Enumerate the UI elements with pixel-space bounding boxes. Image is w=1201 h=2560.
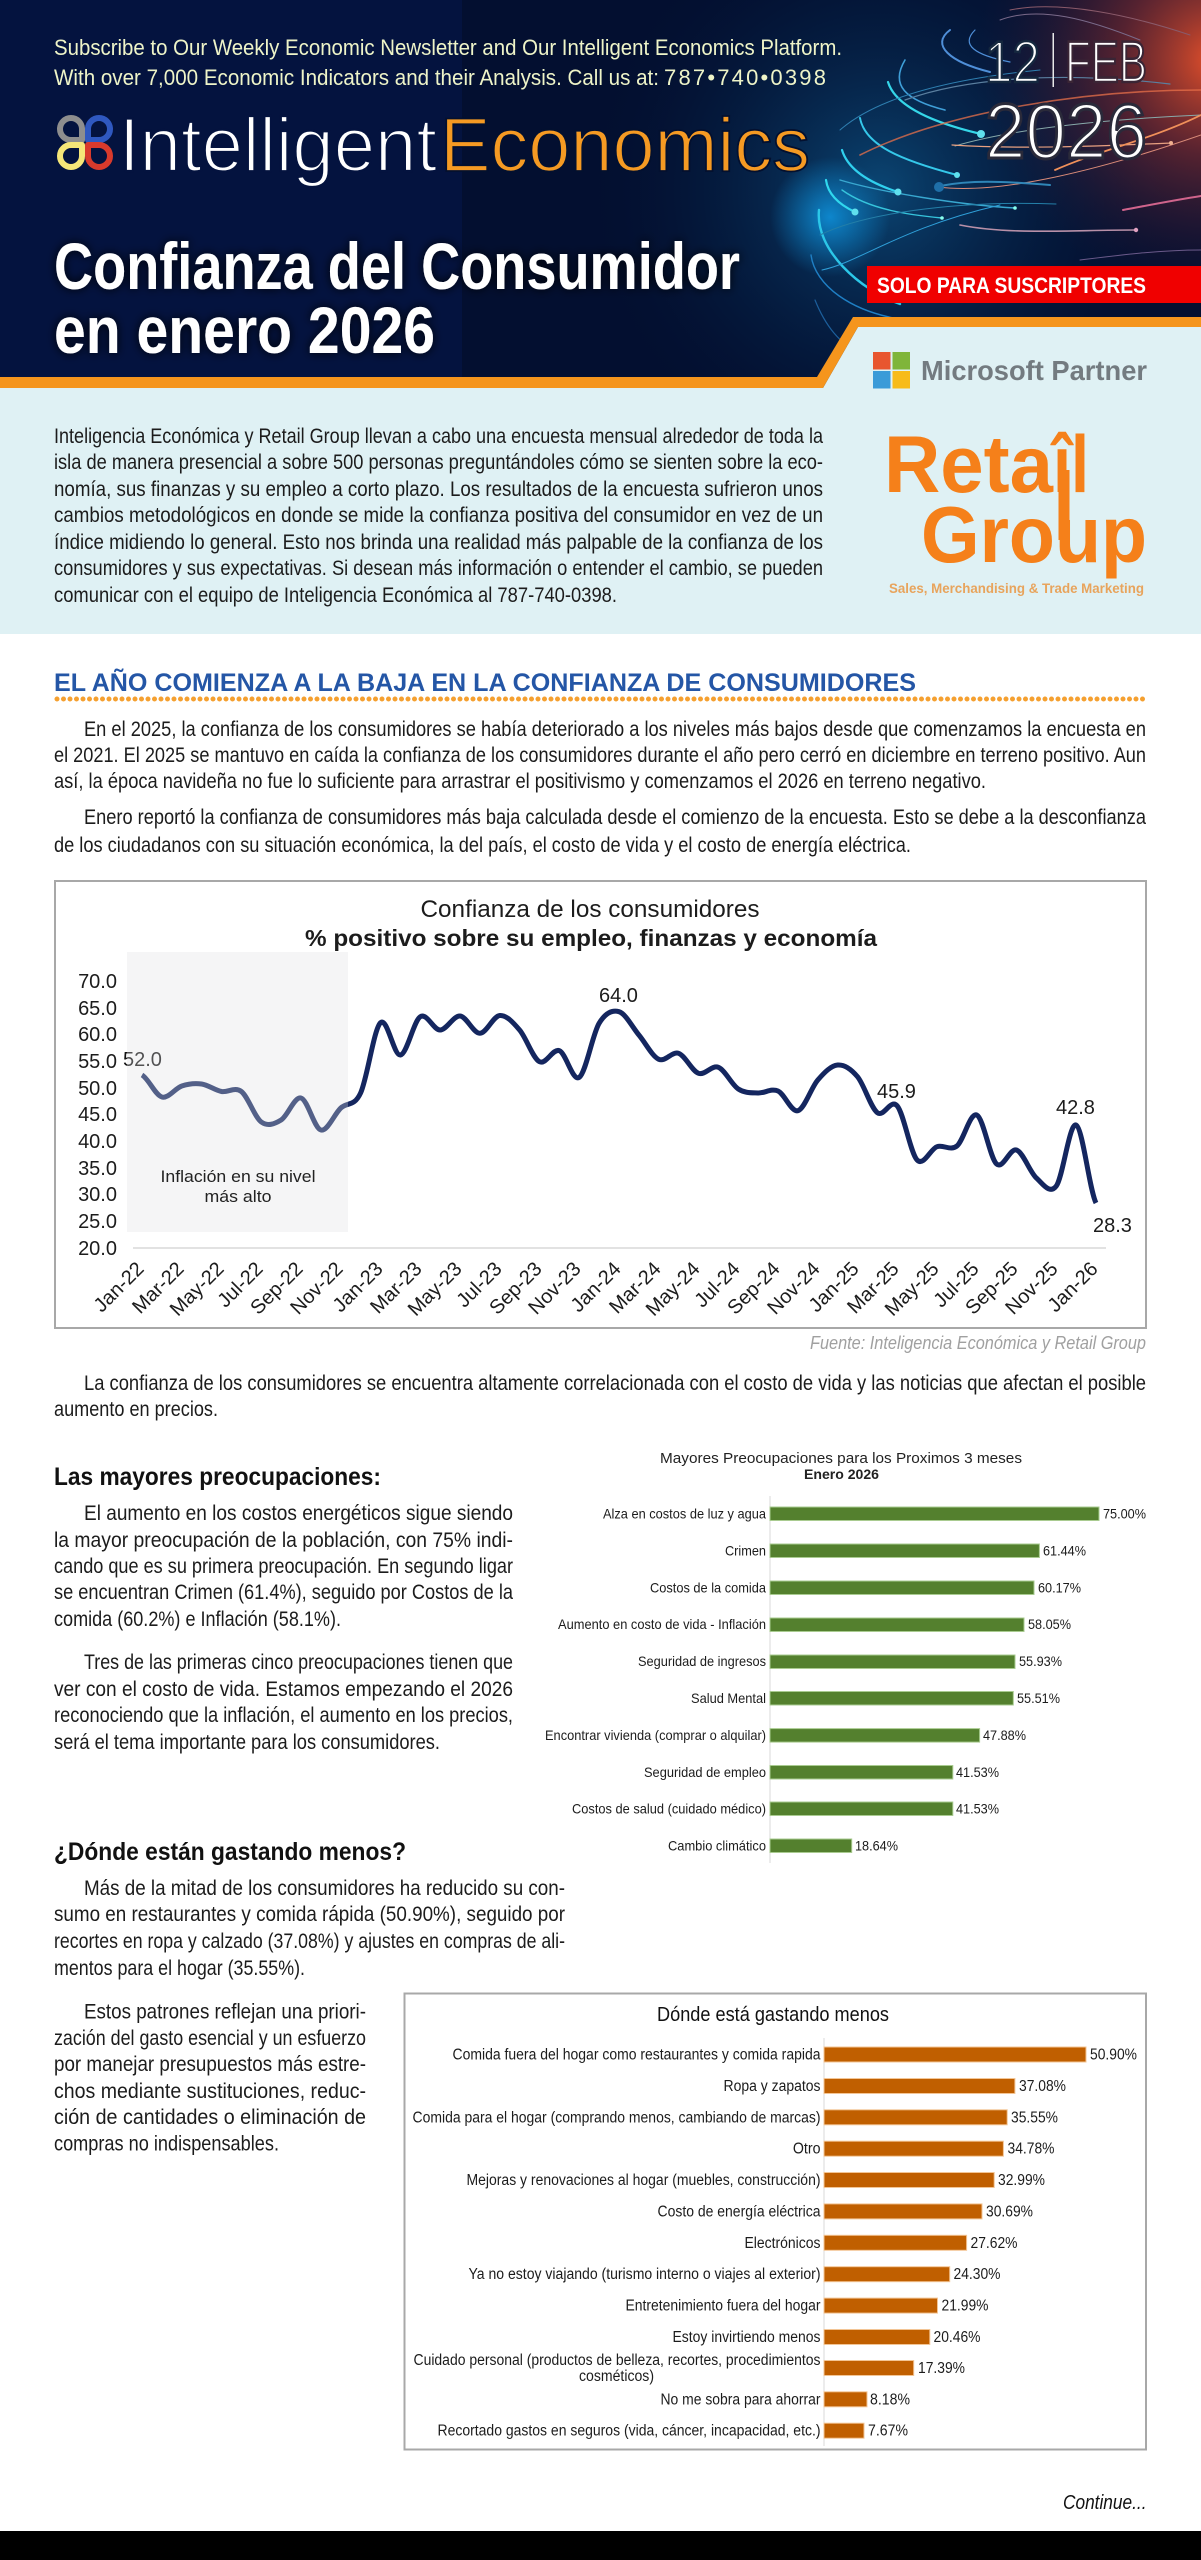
- annotation: inflation: más alto: [204, 1187, 272, 1206]
- value labels: 37.08%: [1019, 2078, 1066, 2095]
- category labels: Seguridad de empleo: [644, 1764, 766, 1780]
- category labels: [412, 2046, 821, 2440]
- value labels: 55.93%: [1019, 1653, 1062, 1669]
- x axis labels: Nov-25: [1001, 1258, 1063, 1319]
- x axis labels: May-22: [166, 1258, 229, 1321]
- intro text: Inteligencia Económica y Retail Group llevan a cabo una encuesta mensual alrededor de toda la: [54, 425, 823, 448]
- value labels: 35.55%: [1011, 2109, 1058, 2126]
- category labels: Costos de la comida: [650, 1580, 766, 1596]
- light panel background: [0, 327, 1201, 634]
- y axis labels: [78, 971, 117, 1260]
- category labels: Salud Mental: [691, 1690, 766, 1706]
- category labels: [545, 1506, 766, 1854]
- x axis labels: Jan-22: [90, 1258, 149, 1317]
- category labels: Crimen: [725, 1542, 766, 1558]
- value labels: [855, 1506, 1146, 1854]
- x axis labels: Jul-23: [452, 1258, 507, 1312]
- y axis labels: 40.0: [78, 1131, 117, 1153]
- x axis labels: Jan-24: [567, 1258, 626, 1317]
- section body text: así, la época navideña no fue lo suficiente para arrastrar el positivismo y comenzamos el 2026 en terreno negativo.: [54, 770, 986, 793]
- category labels: Costos de salud (cuidado médico): [572, 1800, 766, 1816]
- date: 2026: [985, 87, 1147, 175]
- annotation: inflation: Inflación en su nivel: [160, 1167, 316, 1186]
- correlation text: [54, 1372, 1146, 1421]
- subscription text: [54, 35, 842, 90]
- x axis labels: Sep-22: [246, 1258, 308, 1319]
- data labels: 45.9: [877, 1081, 916, 1103]
- category labels: Costo de energía eléctrica: [658, 2203, 821, 2220]
- x axis labels: May-23: [404, 1258, 467, 1321]
- value labels: 27.62%: [970, 2235, 1018, 2252]
- orange bars: [824, 2047, 1086, 2438]
- header background: [0, 0, 1201, 390]
- x axis labels: Nov-23: [524, 1258, 586, 1319]
- patrones text: ción de cantidades o eliminación de: [54, 2106, 366, 2129]
- gasto text: sumo en restaurantes y comida rápida (50.90%), seguido por: [54, 1903, 565, 1926]
- bar chart: mayores preocupaciones: [545, 1450, 1146, 1863]
- title: Confianza del Consumidor: [54, 229, 740, 303]
- chart title: Dónde está gastando menos: [657, 2004, 889, 2026]
- category labels: Estoy invirtiendo menos: [672, 2329, 821, 2346]
- x axis labels: Mar-23: [366, 1258, 427, 1318]
- category labels: Comida para el hogar (comprando menos, cambiando de marcas): [412, 2109, 820, 2126]
- patrones text: por manejar presupuestos más estre-: [54, 2053, 366, 2076]
- value labels: 8.18%: [870, 2391, 910, 2408]
- gasto text: [54, 1877, 565, 1980]
- category labels: Ropa y zapatos: [724, 2078, 821, 2095]
- green bars: [770, 1507, 1099, 1852]
- date: [985, 30, 1147, 175]
- data labels: [599, 985, 1132, 1237]
- y axis labels: 50.0: [78, 1078, 117, 1100]
- intro text: nomía, sus finanzas y su empleo a corto plazo. Los resultados de la encuesta sufrieron unos: [54, 478, 823, 501]
- bar chart: donde esta gastando menos: [404, 1994, 1146, 2450]
- category labels: Comida fuera del hogar como restaurantes y comida rapida: [452, 2046, 821, 2064]
- subscription text: Subscribe to Our Weekly Economic Newsletter and Our Intelligent Economics Platform.: [54, 35, 842, 60]
- retail group logo: Group: [921, 490, 1147, 579]
- logo: intelligent economics: [119, 103, 810, 188]
- patrones text: Estos patrones reflejan una priori-: [84, 2000, 366, 2024]
- category labels: cosméticos): [579, 2368, 654, 2385]
- data labels: 64.0: [599, 985, 638, 1007]
- data labels: 28.3: [1093, 1215, 1132, 1237]
- banner: solo para suscriptores: SOLO PARA SUSCRIPTORES: [877, 273, 1146, 298]
- intro text: comunicar con el equipo de Inteligencia Económica al 787-740-0398.: [54, 584, 617, 607]
- correlation text: aumento en precios.: [54, 1398, 218, 1421]
- date: 12: [985, 30, 1040, 95]
- gasto text: Más de la mitad de los consumidores ha reducido su con-: [84, 1877, 565, 1900]
- value labels: 20.46%: [934, 2329, 981, 2346]
- retail group logo: Sales, Merchandising & Trade Marketing: [889, 580, 1144, 596]
- retail group logo: îl: [1050, 420, 1089, 510]
- section heading: EL AÑO COMIENZA A LA BAJA EN LA CONFIANZA DE CONSUMIDORES: [54, 667, 916, 697]
- patrones text: compras no indispensables.: [54, 2132, 279, 2156]
- preocupaciones text: ver con el costo de vida. Estamos empezando el 2026: [54, 1678, 513, 1701]
- preocupaciones text: la mayor preocupación de la población, con 75% indi-: [54, 1529, 513, 1552]
- x axis labels: Sep-24: [723, 1258, 785, 1319]
- bottom black band: [0, 2531, 1201, 2560]
- category labels: Seguridad de ingresos: [638, 1653, 766, 1669]
- chart source: Fuente: Inteligencia Económica y Retail Group: [810, 1333, 1146, 1353]
- x axis labels: Jul-24: [690, 1258, 745, 1312]
- patrones text: [54, 2000, 366, 2156]
- data label 52.0: 52.0: [123, 1049, 162, 1071]
- chart title: Enero 2026: [804, 1466, 879, 1482]
- section body text: de los ciudadanos con su situación económica, la del país, el costo de vida y el costo de energía eléctrica.: [54, 834, 911, 857]
- category labels: Cuidado personal (productos de belleza, recortes, procedimientos: [414, 2352, 821, 2369]
- value labels: 60.17%: [1038, 1580, 1081, 1596]
- line chart: confianza de los consumidores: [55, 881, 1146, 1328]
- intro text: isla de manera presencial a sobre 500 personas preguntándoles cómo se sienten sobre la eco-: [54, 451, 823, 474]
- value labels: 41.53%: [956, 1764, 999, 1780]
- banner: solo para suscriptores: [867, 266, 1201, 303]
- value labels: 55.51%: [1017, 1690, 1060, 1706]
- continue text: Continue...: [1063, 2492, 1146, 2514]
- patrones text: chos mediante sustituciones, reduc-: [54, 2080, 366, 2103]
- value labels: 50.90%: [1090, 2046, 1137, 2064]
- data line: [142, 1011, 1096, 1203]
- chart title: Confianza de los consumidores: [420, 896, 760, 923]
- category labels: Encontrar vivienda (comprar o alquilar): [545, 1727, 766, 1743]
- x axis labels: Mar-24: [605, 1258, 666, 1318]
- retail group logo: Reta: [884, 420, 1054, 510]
- category labels: Mejoras y renovaciones al hogar (muebles, construcción): [466, 2172, 820, 2189]
- value labels: 30.69%: [986, 2203, 1033, 2220]
- gasto text: recortes en ropa y calzado (37.08%) y ajustes en compras de ali-: [54, 1930, 565, 1953]
- preocupaciones text: Tres de las primeras cinco preocupaciones tienen que: [84, 1651, 513, 1674]
- icon: microsoft logo: [873, 352, 910, 388]
- preocupaciones text: El aumento en los costos energéticos sigue siendo: [84, 1502, 513, 1525]
- microsoft partner text: Microsoft Partner: [921, 355, 1147, 386]
- category labels: Otro: [793, 2141, 820, 2158]
- x axis labels: Mar-22: [128, 1258, 189, 1318]
- x axis labels: Jul-25: [929, 1258, 984, 1312]
- heading: las mayores preocupaciones: Las mayores preocupaciones:: [54, 1463, 381, 1491]
- icon: intelligent economics knot: [60, 118, 110, 167]
- y axis labels: 35.0: [78, 1158, 117, 1180]
- logo: intelligent economics: Economics: [440, 103, 810, 188]
- subscription text: With over 7,000 Economic Indicators and their Analysis. Call us at:: [54, 65, 659, 90]
- globe light arcs: [811, 7, 1201, 352]
- value labels: 47.88%: [983, 1727, 1026, 1743]
- preocupaciones text: se encuentran Crimen (61.4%), seguido por Costos de la: [54, 1581, 513, 1604]
- value labels: 32.99%: [998, 2172, 1045, 2189]
- x axis line: [133, 1247, 1106, 1249]
- orange border: [0, 317, 1201, 388]
- x axis labels: May-25: [881, 1258, 944, 1321]
- value labels: 34.78%: [1008, 2141, 1055, 2158]
- x axis labels: Jul-22: [213, 1258, 268, 1312]
- preocupaciones text: será el tema importante para los consumidores.: [54, 1731, 440, 1754]
- data labels: 42.8: [1056, 1097, 1095, 1119]
- retail group logo: [884, 420, 1147, 596]
- category labels: Recortado gastos en seguros (vida, cáncer, incapacidad, etc.): [438, 2423, 820, 2440]
- chart title: % positivo sobre su empleo, finanzas y economía: [305, 925, 877, 951]
- preocupaciones text: cando que es su primera preocupación. En segundo ligar: [54, 1555, 513, 1578]
- y axis labels: 55.0: [78, 1051, 117, 1073]
- y axis labels: 70.0: [78, 971, 117, 993]
- y axis labels: 65.0: [78, 998, 117, 1020]
- preocupaciones text: [54, 1502, 513, 1754]
- y axis labels: 60.0: [78, 1024, 117, 1046]
- value labels: 17.39%: [918, 2360, 965, 2377]
- y axis labels: 20.0: [78, 1238, 117, 1260]
- chart title: Mayores Preocupaciones para los Proximos 3 meses: [660, 1450, 1022, 1467]
- intro text: cambios metodológicos en donde se mide la confianza positiva del consumidor en vez de un: [54, 504, 823, 527]
- section body text: [54, 718, 1146, 857]
- x axis labels: Nov-24: [763, 1258, 825, 1319]
- category labels: Entretenimiento fuera del hogar: [626, 2298, 820, 2315]
- category labels: Aumento en costo de vida - Inflación: [558, 1616, 766, 1632]
- value labels: 18.64%: [855, 1838, 898, 1854]
- value labels: 7.67%: [868, 2423, 908, 2440]
- category labels: Electrónicos: [744, 2235, 821, 2252]
- intro text: [54, 425, 823, 607]
- category labels: No me sobra para ahorrar: [660, 2391, 820, 2408]
- value labels: [868, 2046, 1137, 2440]
- category labels: Alza en costos de luz y agua: [603, 1506, 766, 1522]
- value labels: 58.05%: [1028, 1616, 1071, 1632]
- gasto text: mentos para el hogar (35.55%).: [54, 1957, 305, 1980]
- heading: donde estan gastando menos: ¿Dónde están gastando menos?: [54, 1838, 406, 1866]
- date: FEB: [1065, 30, 1147, 95]
- chart title: [305, 896, 877, 951]
- preocupaciones text: comida (60.2%) e Inflación (58.1%).: [54, 1608, 341, 1631]
- value labels: 75.00%: [1103, 1506, 1146, 1522]
- y axis labels: 30.0: [78, 1184, 117, 1206]
- value labels: 61.44%: [1043, 1542, 1086, 1558]
- value labels: 24.30%: [954, 2266, 1001, 2283]
- x axis labels: Mar-25: [843, 1258, 904, 1318]
- x axis labels: Sep-23: [485, 1258, 547, 1319]
- intro text: consumidores y sus expectativas. Si desean más información o entender el cambio, se pueden: [54, 557, 823, 580]
- x axis labels: Nov-22: [286, 1258, 348, 1319]
- x axis labels: [90, 1258, 1103, 1321]
- shaded band: inflation: [127, 952, 348, 1232]
- title: [54, 229, 740, 367]
- patrones text: zación del gasto esencial y un esfuerzo: [54, 2027, 366, 2050]
- subscription text: 787•740•0398: [664, 65, 826, 90]
- value labels: 41.53%: [956, 1800, 999, 1816]
- category labels: Cambio climático: [668, 1838, 766, 1854]
- category labels: Ya no estoy viajando (turismo interno o viajes al exterior): [468, 2266, 820, 2283]
- title: en enero 2026: [54, 293, 435, 367]
- x axis labels: Jan-26: [1044, 1258, 1103, 1317]
- intro text: índice midiendo lo general. Esto nos brinda una realidad más palpable de la confianza de los: [54, 531, 823, 554]
- logo: intelligent economics: Intelligent: [119, 103, 437, 188]
- x axis labels: Jan-23: [329, 1258, 388, 1317]
- y axis labels: 45.0: [78, 1104, 117, 1126]
- x axis labels: May-24: [642, 1258, 705, 1321]
- preocupaciones text: reconociendo que la inflación, el aumento en los precios,: [54, 1704, 513, 1727]
- value labels: 21.99%: [942, 2298, 989, 2315]
- annotation: inflation: [160, 1167, 316, 1206]
- x axis labels: Jan-25: [805, 1258, 864, 1317]
- y axis labels: 25.0: [78, 1211, 117, 1233]
- x axis labels: Sep-25: [961, 1258, 1023, 1319]
- chart title: [660, 1450, 1022, 1482]
